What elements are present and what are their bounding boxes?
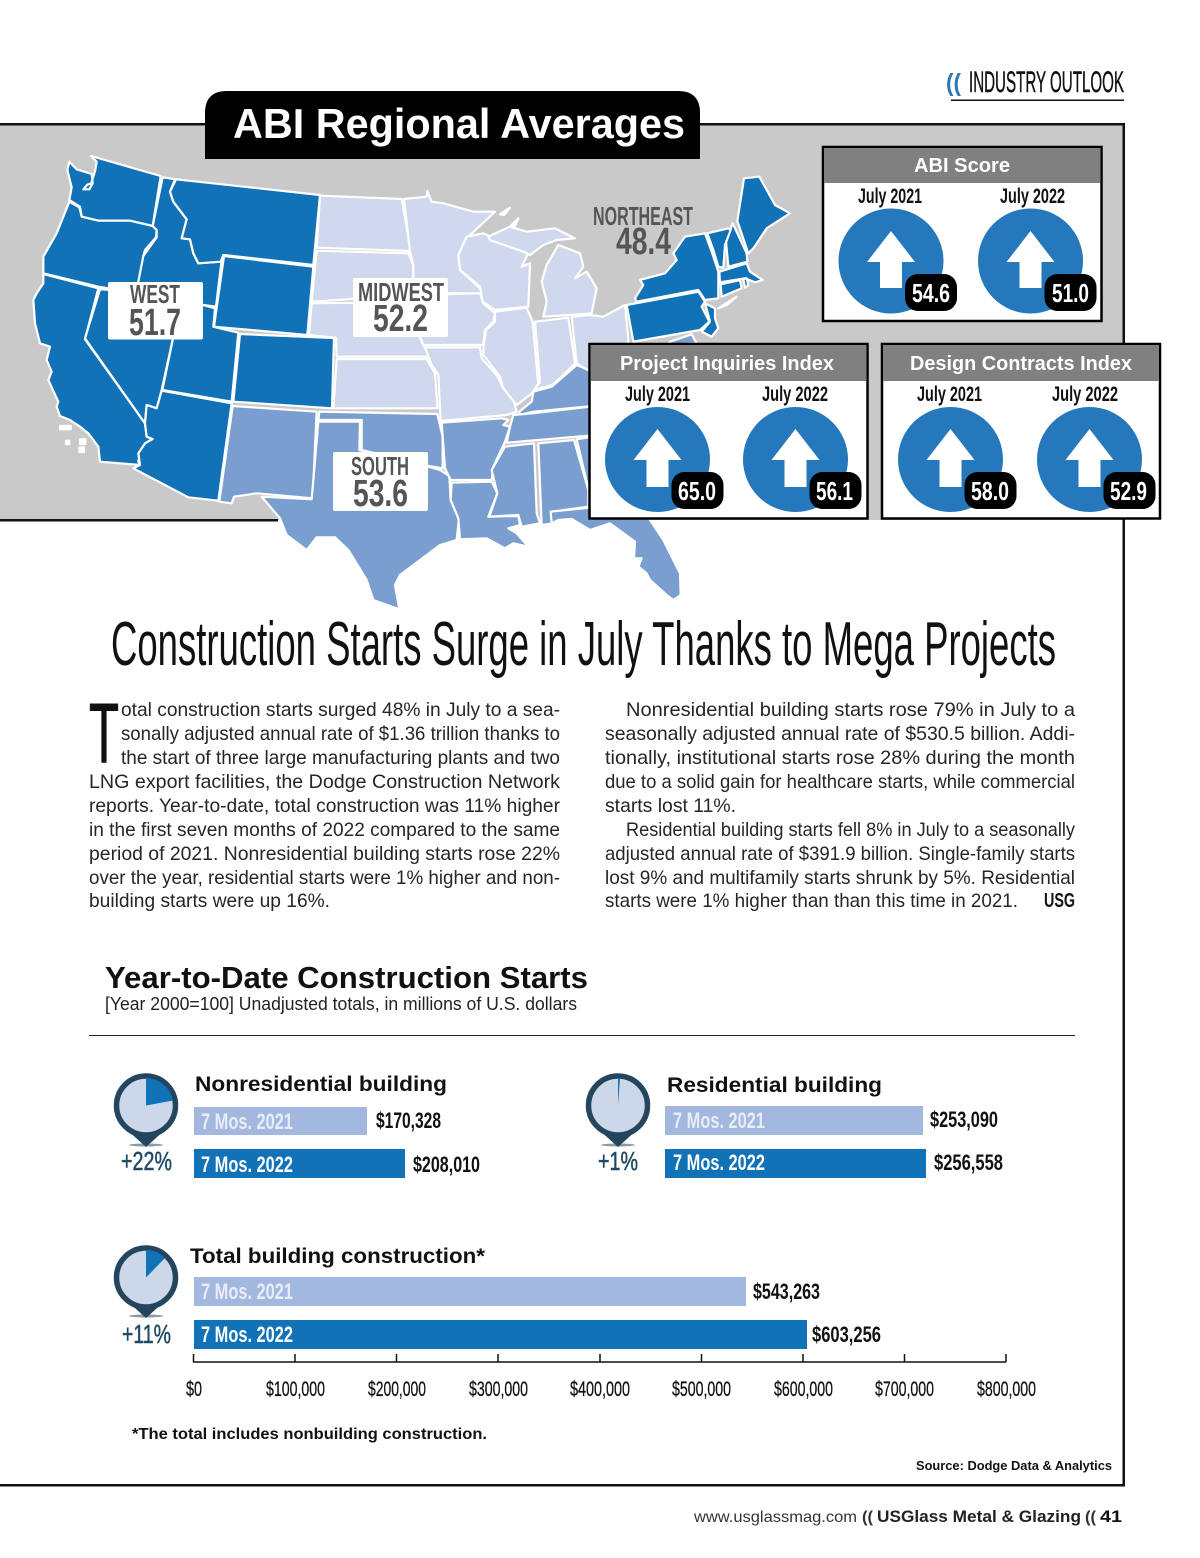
chart: Nonresidential building: 7 Mos. 2021 — [201, 1109, 293, 1134]
map label: Northeast 48.4: NORTHEAST — [593, 201, 693, 231]
icon: pie pin +1%: +1% — [598, 1146, 638, 1176]
article text: left column: building starts were up 16%. — [89, 890, 330, 912]
page footer: (( — [862, 1509, 874, 1526]
section header: industry outlook: (( — [946, 69, 962, 97]
panel: ABI Score: July 2021 — [858, 185, 922, 208]
gauge: ABI July 2022 — [978, 208, 1096, 314]
chart axis: $300,000 — [469, 1378, 528, 1401]
icon: pie pin +1% — [588, 1076, 648, 1176]
panel: ABI Score: July 2022 — [1000, 185, 1065, 208]
map region: Northeast — [627, 177, 790, 342]
article text: right column: adjusted annual rate of $391.9 billion. Single-family starts — [605, 843, 1075, 865]
gauge: Design Contracts July 2022: 52.9 — [1110, 476, 1147, 506]
chart: Residential building: 7 Mos. 2022 — [673, 1150, 765, 1175]
gauge: Design Contracts July 2021: 58.0 — [971, 476, 1009, 506]
south: Florida — [551, 502, 681, 600]
icon: pie pin +22% — [116, 1076, 176, 1176]
title tab: ABI Regional Averages: ABI Regional Averages — [233, 100, 685, 147]
chart axis: $600,000 — [774, 1378, 833, 1401]
article text: right column: tionally, institutional starts rose 28% during the month — [605, 747, 1075, 769]
chart: Residential building — [588, 1073, 1003, 1178]
page footer: USGlass Metal & Glazing — [877, 1507, 1081, 1526]
chart: Residential building: $253,090 — [930, 1107, 998, 1132]
chart: Total building construction: $543,263 — [753, 1279, 820, 1304]
chart: Total building construction: 7 Mos. 2022 — [201, 1322, 293, 1347]
page footer: www.usglassmag.com — [693, 1509, 857, 1526]
article text: right column: Nonresidential building starts rose 79% in July to a — [626, 699, 1075, 721]
gauge: ABI July 2022: 51.0 — [1052, 278, 1089, 308]
article text: right column: starts lost 11%. — [605, 795, 736, 817]
section header: industry outlook — [946, 66, 1124, 101]
chart: Total building construction: 7 Mos. 2021 — [201, 1279, 293, 1304]
panel: ABI Score: ABI Score — [914, 155, 1010, 177]
title tab: ABI Regional Averages — [205, 91, 700, 159]
panel: ABI Score — [823, 147, 1102, 321]
chart: Nonresidential building: 7 Mos. 2022 — [201, 1152, 293, 1177]
south: Oklahoma, Texas and Gulf states — [262, 407, 597, 609]
article text: right column: USG — [1044, 890, 1075, 912]
chart: Residential building: $256,558 — [934, 1150, 1003, 1175]
panel: Project Inquiries Index: Project Inquiries Index — [620, 353, 834, 375]
map label: South 53.6 — [333, 451, 428, 515]
article text: left column: the start of three large manufacturing plants and two — [121, 747, 560, 769]
map region: South — [219, 334, 697, 609]
footnote: *The total includes nonbuilding construction. — [132, 1426, 487, 1443]
chart: Residential building: Residential building — [667, 1073, 882, 1097]
chart axis: $0 — [186, 1378, 202, 1401]
south: Delaware and Virginia strip — [670, 334, 697, 345]
article text: left column: over the year, residential starts were 1% higher and non- — [89, 867, 560, 889]
chart: Residential building: 7 Mos. 2021 — [673, 1108, 765, 1133]
page footer — [693, 1507, 1122, 1526]
article text: left column: in the first seven months of 2022 compared to the same — [89, 819, 560, 841]
chart heading — [89, 960, 1075, 1036]
article text: right column: lost 9% and multifamily starts shrunk by 5%. Residential — [605, 867, 1075, 889]
gauge: Project Inquiries July 2022: 56.1 — [816, 476, 853, 506]
panel: Project Inquiries Index: July 2022 — [762, 383, 828, 406]
map region: Midwest — [309, 191, 628, 421]
chart: Nonresidential building — [116, 1072, 480, 1178]
article text: left column: reports. Year-to-date, total construction was 11% higher — [89, 795, 560, 817]
article text: right column: starts were 1% higher than than this time in 2021. — [605, 890, 1018, 912]
map: United States regions — [33, 156, 790, 609]
panel: Design Contracts Index: Design Contracts Index — [910, 353, 1132, 375]
gauge: ABI July 2021: 54.6 — [912, 278, 950, 308]
gauge: Design Contracts July 2022 — [1037, 407, 1156, 512]
gauge: Project Inquiries July 2021: 65.0 — [678, 476, 716, 506]
article text: left column — [89, 686, 560, 912]
gauge: ABI July 2021 — [838, 208, 957, 314]
article text: left column: LNG export facilities, the Dodge Construction Network — [89, 771, 560, 793]
panel: Project Inquiries Index — [590, 344, 868, 518]
gauge: Project Inquiries July 2021 — [605, 407, 724, 512]
article text: right column: Residential building starts fell 8% in July to a seasonally — [626, 819, 1075, 841]
icon: pie pin +11% — [116, 1248, 176, 1349]
map label: West 51.7 — [108, 279, 203, 344]
map label: Midwest 52.2: 52.2 — [373, 298, 428, 340]
article text: left column: period of 2021. Nonresidential building starts rose 22% — [89, 843, 560, 865]
icon: pie pin +22%: +22% — [121, 1146, 172, 1176]
panel: Design Contracts Index: July 2021 — [917, 383, 982, 406]
article text: right column: seasonally adjusted annual rate of $530.5 billion. Addi- — [605, 723, 1075, 745]
map label: Northeast 48.4: 48.4 — [616, 221, 671, 263]
map region: West — [33, 156, 334, 501]
map label: Midwest 52.2: MIDWEST — [358, 277, 444, 307]
icon: pie pin +11%: +11% — [122, 1319, 171, 1349]
chart: Total building construction: $603,256 — [812, 1322, 881, 1347]
chart heading: Year-to-Date Construction Starts — [105, 960, 588, 995]
chart: Total building construction: Total building construction* — [190, 1244, 486, 1268]
article text: right column: due to a solid gain for healthcare starts, while commercial — [605, 771, 1075, 793]
panel: Design Contracts Index: July 2022 — [1052, 383, 1118, 406]
map label: West 51.7: WEST — [130, 279, 180, 309]
map label: West 51.7: 51.7 — [129, 302, 181, 344]
map label: Midwest 52.2 — [353, 277, 448, 340]
panel: Project Inquiries Index: July 2021 — [625, 383, 690, 406]
chart: Nonresidential building: $208,010 — [413, 1152, 480, 1177]
article text: left column: T — [89, 686, 119, 780]
gauge: Design Contracts July 2021 — [898, 407, 1016, 512]
chart heading: [Year 2000=100] Unadjusted totals, in millions of U.S. dollars — [105, 994, 577, 1014]
map label: South 53.6: SOUTH — [351, 451, 409, 481]
chart: Nonresidential building: $170,328 — [376, 1108, 441, 1133]
chart axis: $200,000 — [368, 1378, 426, 1401]
chart: Total building construction — [116, 1244, 881, 1349]
page footer: (( — [1085, 1509, 1097, 1526]
map label: Northeast 48.4 — [593, 201, 693, 263]
map label: South 53.6: 53.6 — [353, 473, 408, 515]
chart axis: $400,000 — [570, 1378, 630, 1401]
south: Kentucky — [519, 365, 603, 415]
article text: left column: otal construction starts surged 48% in July to a sea- — [121, 699, 560, 721]
page footer: 41 — [1100, 1507, 1122, 1526]
chart: Nonresidential building: Nonresidential building — [195, 1072, 447, 1096]
chart axis — [186, 1354, 1036, 1401]
south: New Mexico — [219, 406, 317, 503]
article text: left column: sonally adjusted annual rate of $1.36 trillion thanks to — [121, 723, 560, 745]
chart axis: $100,000 — [266, 1378, 325, 1401]
source credit: Source: Dodge Data & Analytics — [916, 1459, 1112, 1473]
chart axis: $800,000 — [977, 1378, 1036, 1401]
chart axis: $500,000 — [672, 1378, 731, 1401]
chart axis: $700,000 — [875, 1378, 934, 1401]
panel: Design Contracts Index — [882, 344, 1160, 518]
article text: right column — [605, 699, 1075, 912]
gauge: Project Inquiries July 2022 — [743, 407, 862, 512]
